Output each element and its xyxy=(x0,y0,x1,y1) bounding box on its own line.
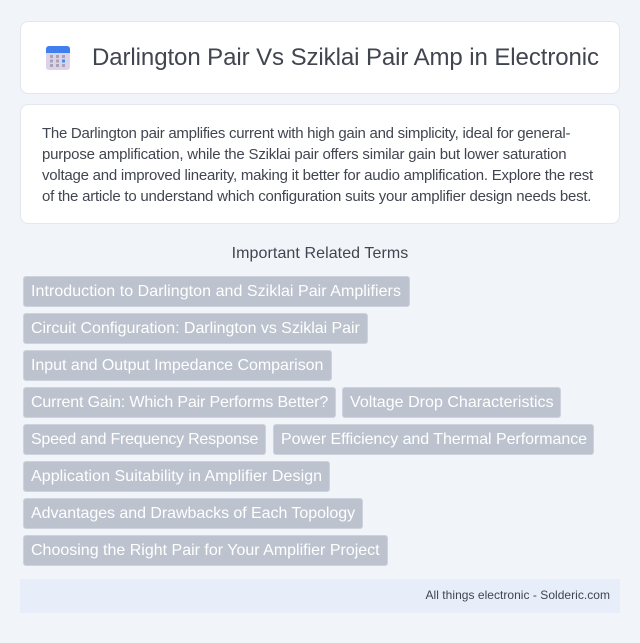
chip: Speed and Frequency Response xyxy=(31,431,258,448)
chip xyxy=(23,350,332,381)
intro text: The Darlington pair amplifies current with high gain and simplicity, ideal for general- xyxy=(42,125,570,142)
title card xyxy=(20,21,620,94)
chip: Voltage Drop Characteristics xyxy=(350,394,554,411)
footer xyxy=(20,579,620,613)
intro text: purpose amplification, while the Sziklai pair offers similar gain but lower saturation xyxy=(42,146,566,163)
term chips xyxy=(23,276,594,566)
chip xyxy=(23,313,368,344)
chip xyxy=(23,387,336,418)
chip xyxy=(273,424,594,455)
chip: Introduction to Darlington and Sziklai Pair Amplifiers xyxy=(31,283,401,300)
chip: Circuit Configuration: Darlington vs Sziklai Pair xyxy=(31,320,360,337)
chip: Application Suitability in Amplifier Design xyxy=(31,468,322,485)
icon: calendar xyxy=(46,46,70,70)
chip xyxy=(23,276,410,307)
chip: Advantages and Drawbacks of Each Topology xyxy=(31,505,355,522)
title: Darlington Pair Vs Sziklai Pair Amp in Electronic xyxy=(92,44,599,71)
chip xyxy=(23,535,388,566)
chip: Current Gain: Which Pair Performs Better? xyxy=(31,394,328,411)
footer credit: All things electronic - Solderic.com xyxy=(426,588,610,602)
heading: important related terms: Important Related Terms xyxy=(232,245,408,262)
chip xyxy=(23,461,330,492)
chip xyxy=(342,387,561,418)
chip: Power Efficiency and Thermal Performance xyxy=(281,431,587,448)
intro text xyxy=(42,125,594,205)
panel: intro paragraph xyxy=(20,104,620,224)
intro text: voltage and improved linearity, making it better for audio amplification. Explore the rest xyxy=(42,167,593,184)
chip: Input and Output Impedance Comparison xyxy=(31,357,323,374)
chip xyxy=(23,424,266,455)
chip: Choosing the Right Pair for Your Amplifier Project xyxy=(31,542,380,559)
intro text: of the article to understand which configuration suits your amplifier design needs best. xyxy=(42,188,591,205)
chip xyxy=(23,498,363,529)
